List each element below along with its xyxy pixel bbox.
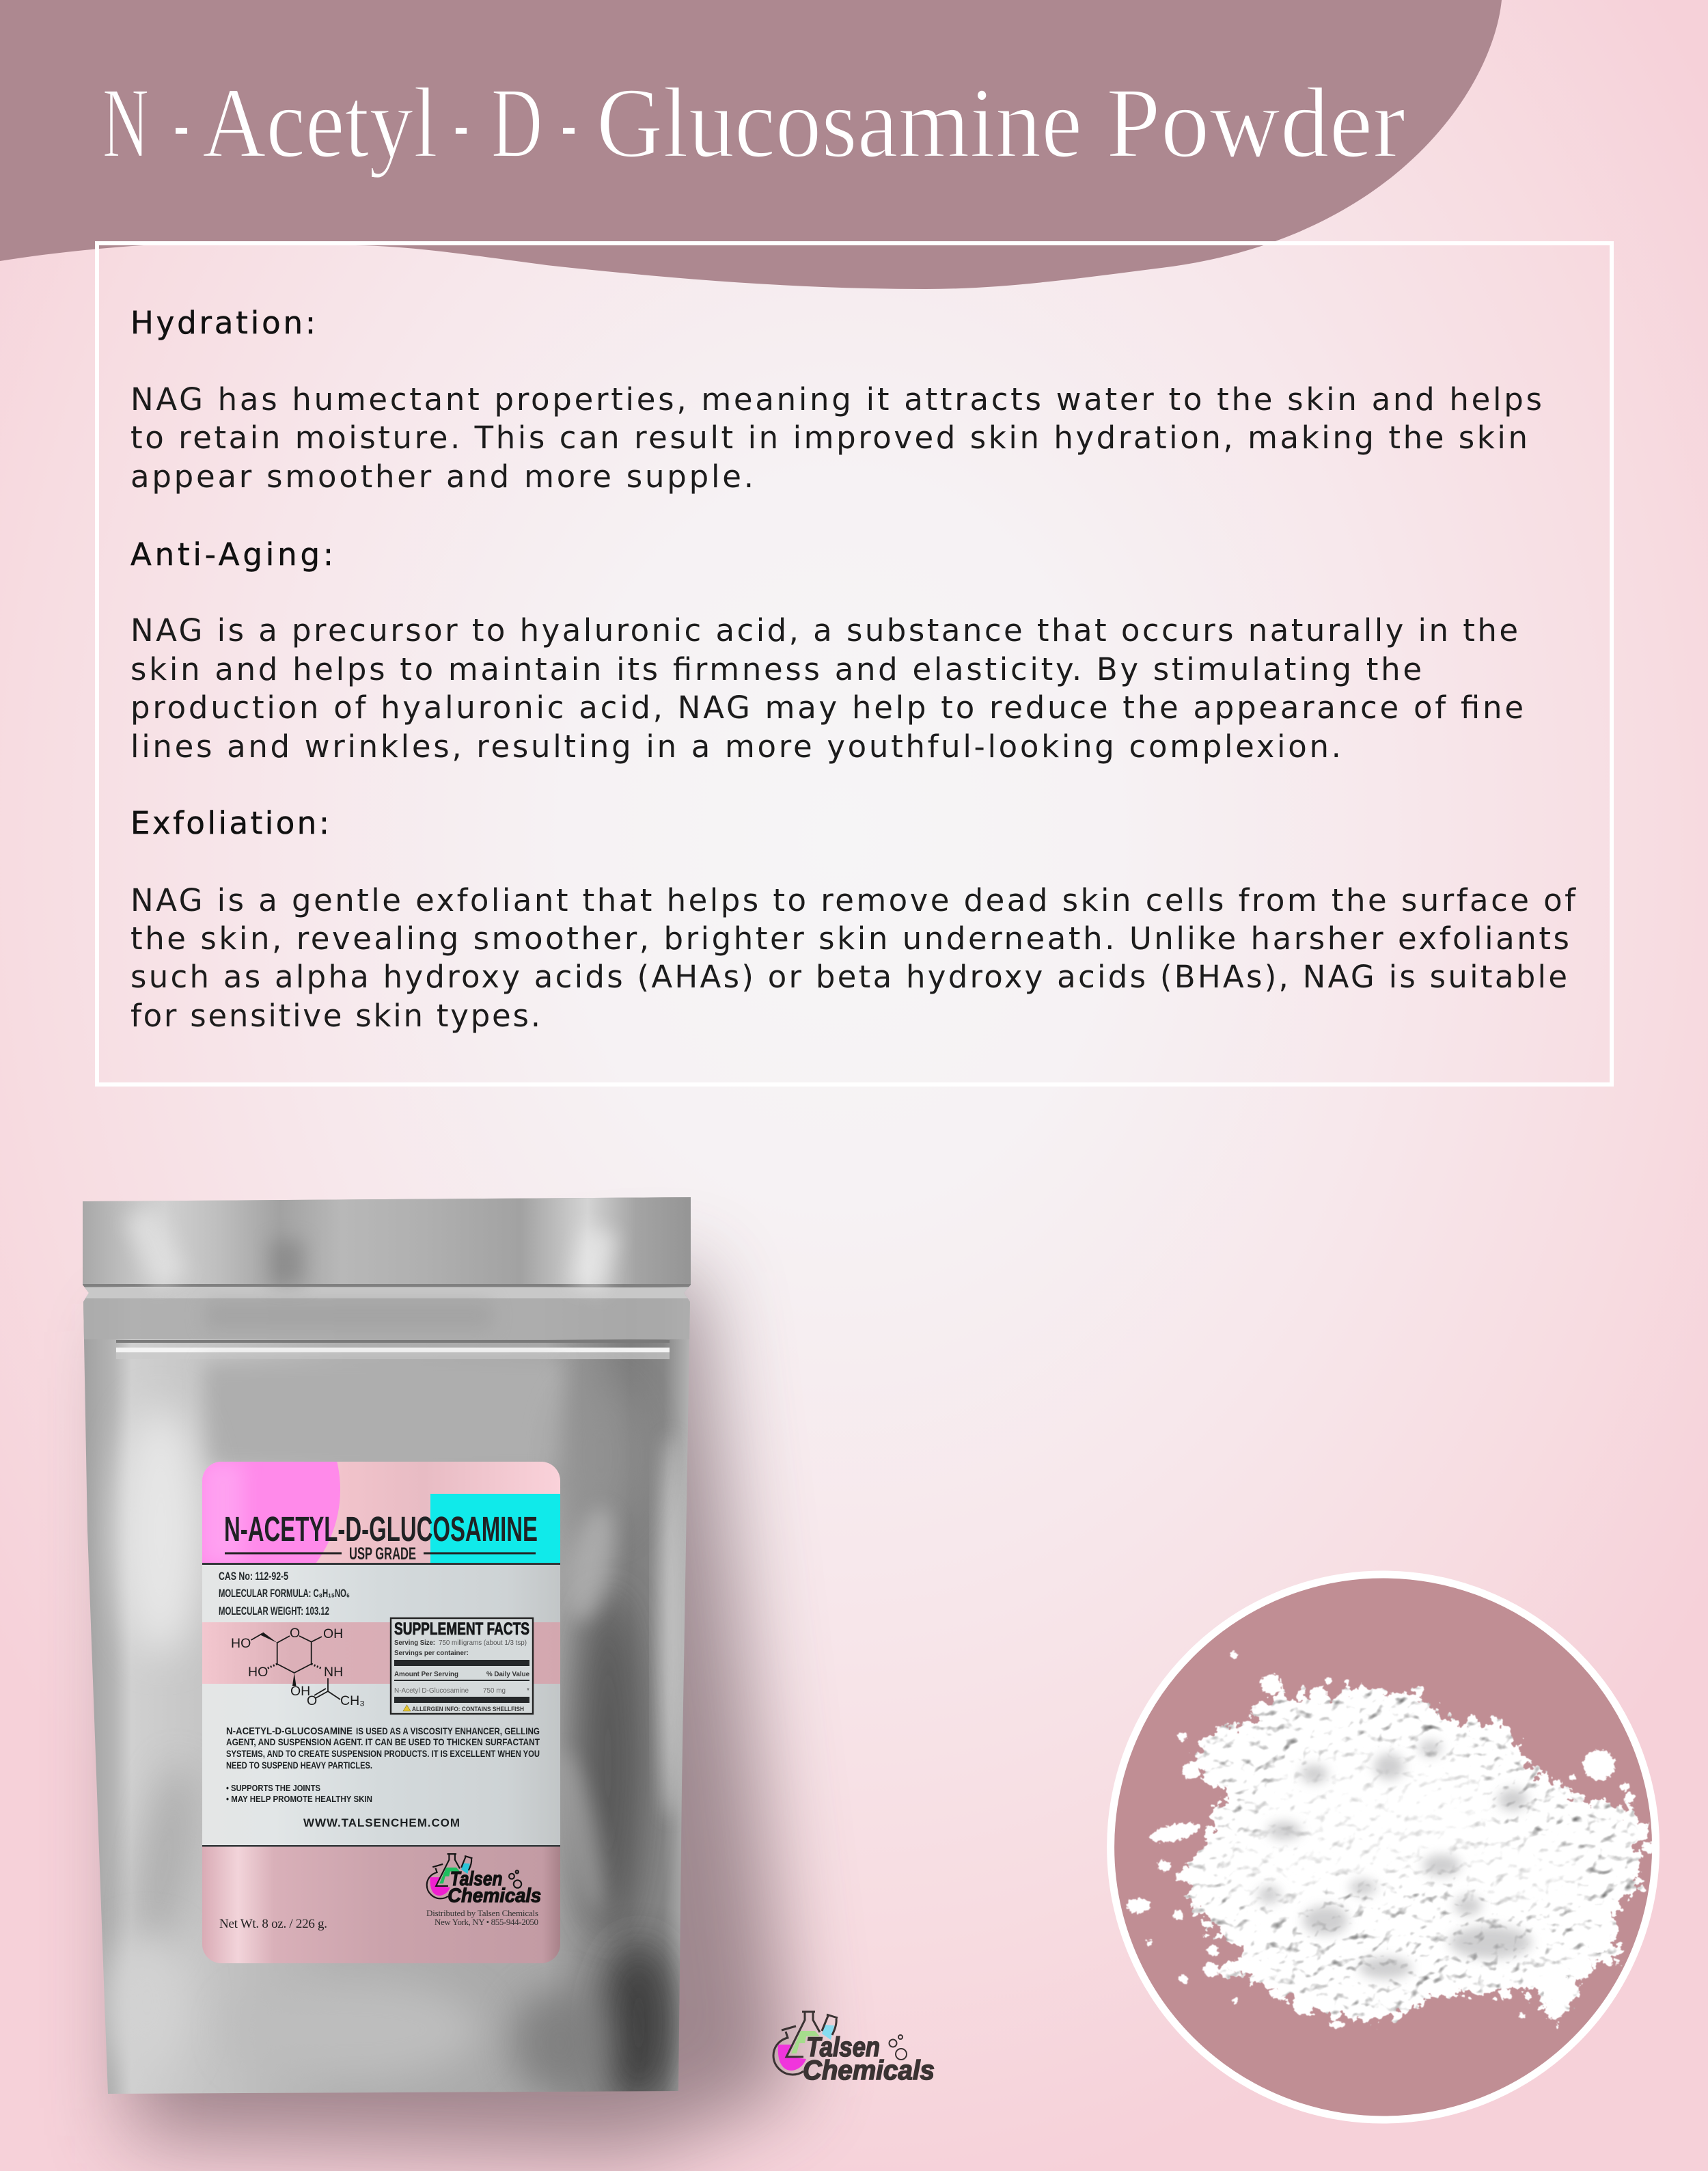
text block: exfoliation: [130, 805, 1576, 1034]
supplement facts box: % Daily Value: [486, 1670, 529, 1678]
text block: hydration: [130, 305, 1542, 495]
paragraph: exfoliation: for sensitive skin types.: [130, 998, 540, 1034]
powder photo circle: [1111, 1574, 1656, 2120]
logo: Talsen Chemicals: Chemicals: [803, 2056, 935, 2086]
molecule diagram: HO: [231, 1636, 251, 1651]
logo: Talsen Chemicals: [773, 2012, 935, 2086]
title: -: [454, 65, 469, 176]
label bottom section: Net Wt. 8 oz. / 226 g.: [219, 1917, 327, 1931]
label bottom section: [202, 1845, 560, 1963]
paragraph: exfoliation: such as alpha hydroxy acids (AHAs) or beta hydroxy acids (BHAs), NAG is suitable: [130, 959, 1567, 995]
paragraph: anti-aging: production of hyaluronic acid, NAG may help to reduce the appearance of fine: [130, 689, 1524, 726]
molecule diagram: O: [307, 1693, 317, 1708]
powder pile: [1126, 1652, 1654, 2028]
benefit bullets: • MAY HELP PROMOTE HEALTHY SKIN: [226, 1794, 372, 1804]
chemical properties: MOLECULAR WEIGHT: 103.12: [219, 1605, 329, 1617]
product description: [226, 1725, 540, 1771]
text block: anti-aging: [130, 536, 1524, 765]
title: -: [174, 65, 189, 176]
title: Powder: [1106, 67, 1405, 178]
circle background: [1111, 1574, 1656, 2120]
paragraph: anti-aging: NAG is a precursor to hyaluronic acid, a substance that occurs naturally in the: [130, 612, 1518, 648]
molecule diagram: OH: [323, 1626, 343, 1641]
bag shadow: [130, 1271, 793, 2153]
paragraph: anti-aging: skin and helps to maintain its firmness and elasticity. By stimulating the: [130, 651, 1422, 687]
benefit bullets: • SUPPORTS THE JOINTS: [226, 1783, 320, 1793]
title: Glucosamine: [596, 67, 1082, 178]
molecule diagram: CH₃: [340, 1693, 365, 1708]
panel: benefits frame: [97, 243, 1612, 1084]
label top section: USP GRADE: [349, 1544, 416, 1564]
label middle section: [202, 1564, 560, 1846]
benefit bullets: [226, 1783, 372, 1804]
supplement facts box: 750 mg: [483, 1687, 506, 1695]
product description: SYSTEMS, AND TO CREATE SUSPENSION PRODUCTS. IT IS EXCELLENT WHEN YOU: [226, 1749, 540, 1759]
pink band: [202, 1622, 560, 1684]
label bottom section: Distributed by Talsen Chemicals: [426, 1908, 538, 1918]
logo: Talsen Chemicals: Talsen: [806, 2032, 880, 2062]
website: WWW.TALSENCHEM.COM: [303, 1816, 460, 1829]
header shape: [0, 0, 1502, 289]
label top section: [202, 1462, 560, 1563]
paragraph: hydration: appear smoother and more supple.: [130, 459, 754, 495]
label bottom section: New York, NY • 855-944-2050: [435, 1917, 538, 1927]
molecule diagram: O: [290, 1626, 300, 1641]
paragraph: exfoliation: [130, 882, 1576, 1034]
product label: [202, 1462, 560, 1963]
supplement facts box: 750 milligrams (about 1/3 tsp): [439, 1639, 527, 1647]
title: D: [491, 67, 542, 178]
chemical properties: CAS No: 112-92-5: [219, 1570, 288, 1583]
supplement facts box: N-Acetyl D-Glucosamine: [394, 1687, 469, 1695]
label logo: Chemicals: [447, 1885, 541, 1907]
paragraph: anti-aging: lines and wrinkles, resulting in a more youthful-looking complexion.: [130, 728, 1341, 765]
supplement facts box: Serving Size:: [394, 1639, 435, 1647]
supplement facts box: Amount Per Serving: [394, 1670, 458, 1678]
molecule diagram: HO: [248, 1665, 268, 1680]
paragraph: exfoliation: NAG is a gentle exfoliant that helps to remove dead skin cells from the surface of: [130, 882, 1576, 918]
product description: IS USED AS A VISCOSITY ENHANCER, GELLING: [356, 1726, 540, 1736]
bag foil: [68, 1189, 704, 2105]
title: -: [561, 65, 577, 176]
paragraph: hydration: NAG has humectant properties, meaning it attracts water to the skin and helps: [130, 381, 1542, 418]
heading: exfoliation: Exfoliation:: [130, 805, 329, 841]
paragraph: hydration: to retain moisture. This can result in improved skin hydration, making the skin: [130, 420, 1528, 456]
heading: hydration: Hydration:: [130, 305, 316, 341]
molecule diagram: [231, 1626, 365, 1708]
product description: AGENT, AND SUSPENSION AGENT. IT CAN BE USED TO THICKEN SURFACTANT: [226, 1737, 540, 1747]
heading: anti-aging: Anti-Aging:: [130, 536, 333, 573]
label logo: Talsen: [450, 1868, 502, 1890]
molecule diagram: OH: [290, 1684, 310, 1699]
label logo: [427, 1854, 541, 1907]
supplement facts box: ALLERGEN INFO: CONTAINS SHELLFISH: [412, 1706, 524, 1713]
supplement facts box: Servings per container:: [394, 1649, 469, 1657]
paragraph: exfoliation: the skin, revealing smoother, brighter skin underneath. Unlike harsher exfoliants: [130, 920, 1569, 957]
chemical properties: MOLECULAR FORMULA: C₈H₁₅NO₆: [219, 1587, 350, 1600]
product description: NEED TO SUSPEND HEAVY PARTICLES.: [226, 1760, 372, 1771]
molecule diagram: NH: [324, 1665, 343, 1680]
supplement facts box: *: [527, 1687, 529, 1695]
title: Acetyl: [202, 67, 438, 178]
product description: N-ACETYL-D-GLUCOSAMINE: [226, 1725, 353, 1737]
supplement facts box: [391, 1618, 533, 1714]
title: [102, 65, 1405, 178]
chemical properties: [219, 1570, 350, 1617]
supplement facts box: SUPPLEMENT FACTS: [394, 1620, 529, 1639]
title: N: [102, 67, 149, 178]
product bag: [68, 1189, 704, 2105]
paragraph: anti-aging: [130, 612, 1524, 765]
label top section: N-ACETYL-D-GLUCOSAMINE: [224, 1510, 538, 1548]
paragraph: hydration: [130, 381, 1542, 495]
